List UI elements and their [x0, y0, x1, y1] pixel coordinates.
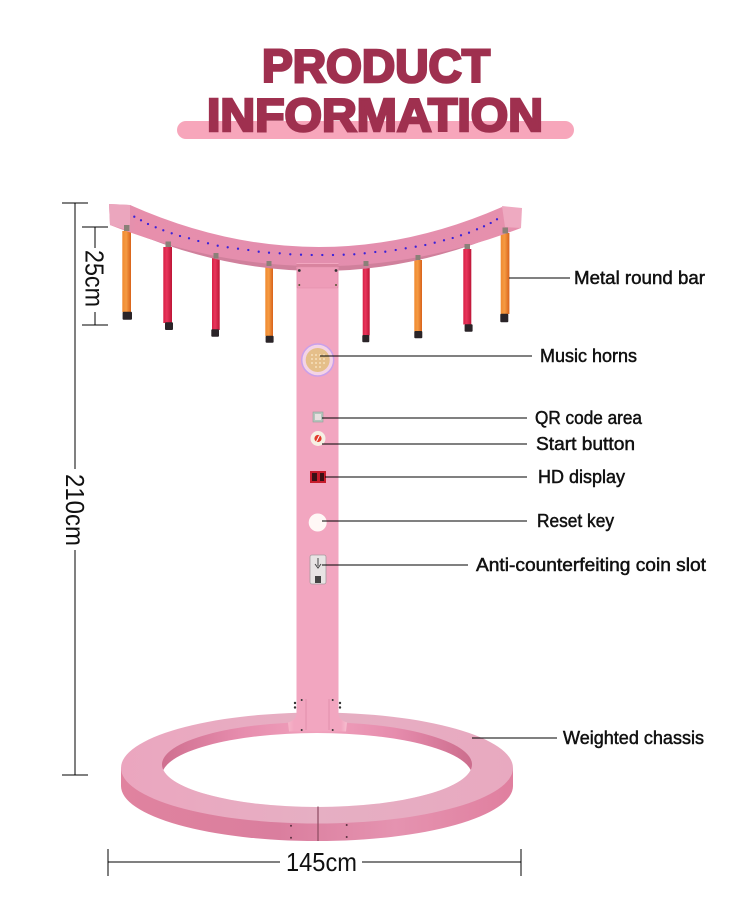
- dimension: 145cm base width: 145cm: [286, 847, 357, 877]
- dimension: 25cm bar length: 25cm: [80, 250, 110, 307]
- central column: [288, 263, 347, 732]
- LED dots: [134, 217, 497, 255]
- icon: music horn speaker: [302, 344, 334, 376]
- dimension: 210cm height: [60, 203, 90, 775]
- title: INFORMATION: INFORMATION: [207, 89, 543, 141]
- icon: coin slot: [310, 555, 326, 584]
- metal round bars: [122, 231, 509, 343]
- title underline bar: [177, 121, 574, 139]
- label: Start button: Start button: [536, 433, 635, 454]
- icon: reset key: [309, 514, 327, 532]
- title: PRODUCT: PRODUCT: [262, 40, 490, 92]
- label: Reset key: Reset key: [537, 510, 615, 531]
- label: Weighted chassis: Weighted chassis: [563, 727, 704, 748]
- label: Music horns: Music horns: [540, 345, 637, 366]
- column base bracket: [294, 699, 341, 731]
- icon: start button: [310, 431, 326, 446]
- label: Anti-counterfeiting coin slot: Anti-counterfeiting coin slot: [476, 554, 706, 575]
- label: HD display: HD display: [538, 466, 626, 487]
- dimension: 145cm base width: [108, 847, 521, 877]
- weighted chassis ring: [121, 712, 513, 841]
- bar connectors: [124, 225, 508, 266]
- label: QR code area: QR code area: [535, 407, 643, 428]
- label: Metal round bar: Metal round bar: [574, 267, 705, 288]
- column top mounting plate: [297, 267, 338, 288]
- leader lines: [320, 278, 570, 738]
- icon: QR code area: [313, 412, 323, 422]
- icon: HD display: [310, 471, 326, 483]
- dimension: 210cm height: 210cm: [60, 474, 90, 546]
- dimension: 25cm bar length: [80, 227, 110, 325]
- curved LED beam: [109, 204, 522, 271]
